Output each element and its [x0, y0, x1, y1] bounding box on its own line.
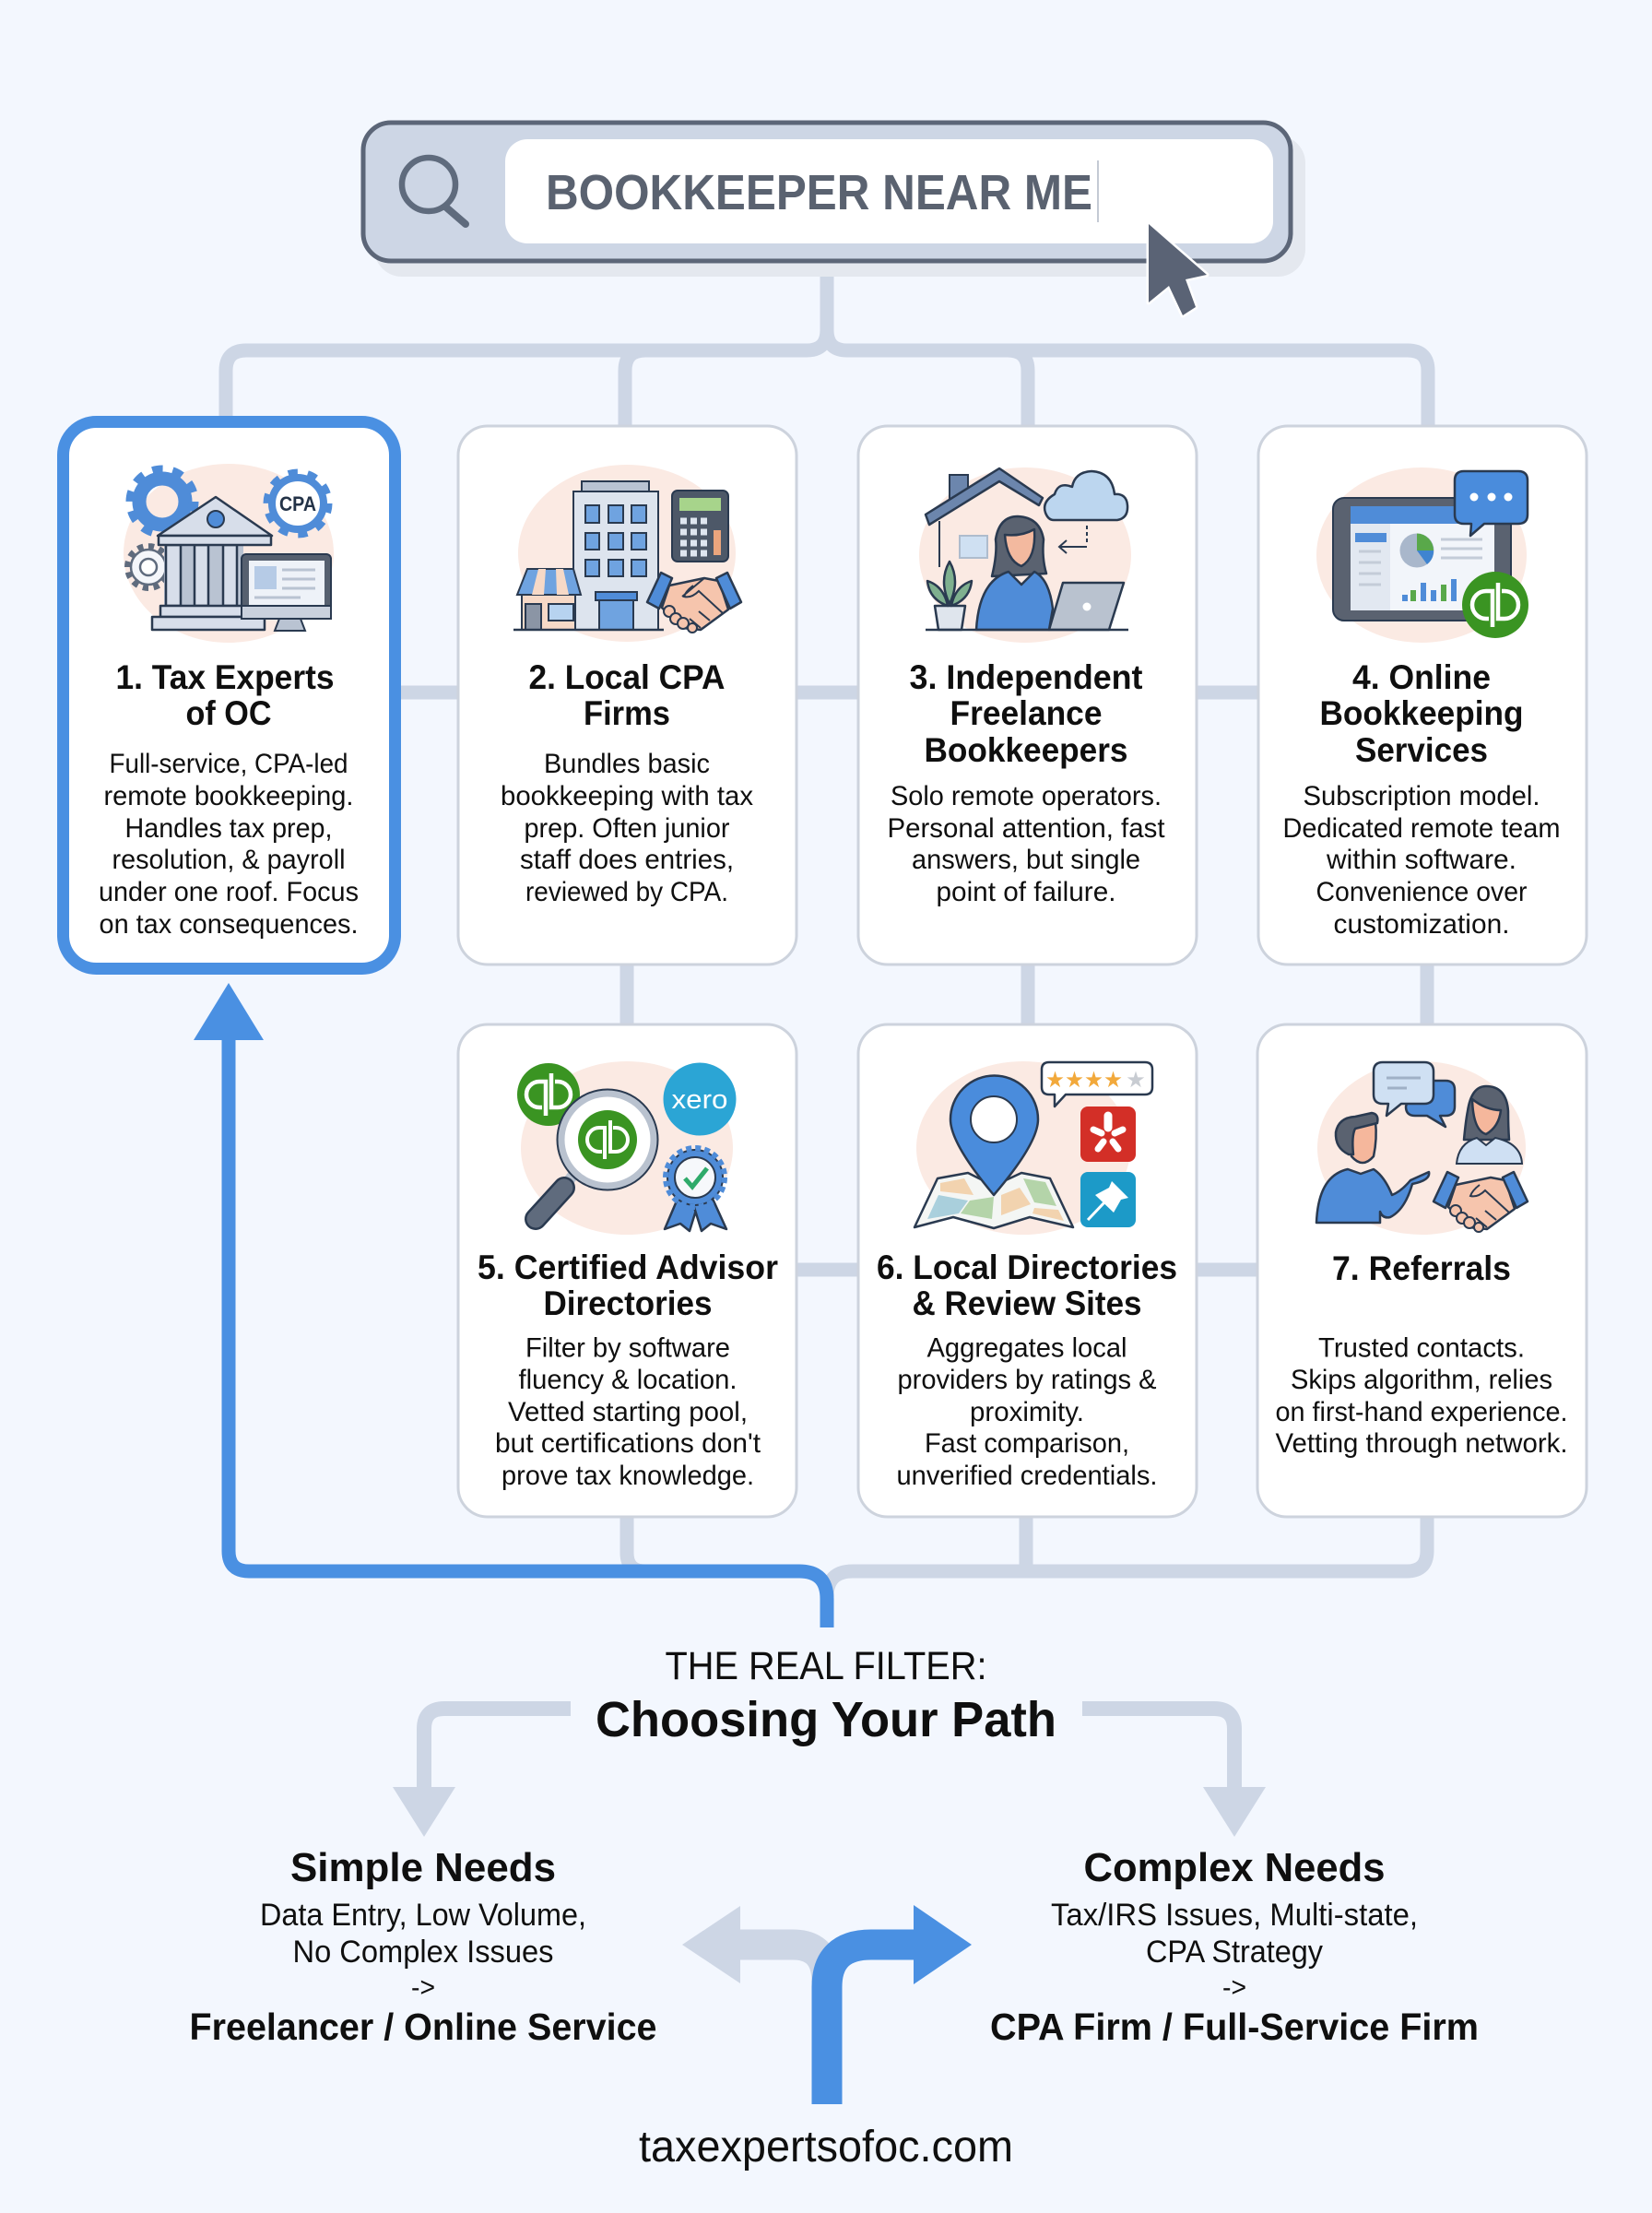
CPA gear label: CPA: [279, 492, 316, 515]
card 2 description: reviewed by CPA.: [525, 877, 728, 907]
card 6 description: Aggregates local: [927, 1333, 1127, 1363]
card 4 description: within software.: [1326, 845, 1516, 875]
card 6 description: providers by ratings &: [898, 1365, 1157, 1395]
card 5 heading: 5. Certified Advisor: [478, 1249, 778, 1286]
icon: mouse pointer: [1149, 224, 1207, 315]
card 1 description: under one roof. Focus: [99, 877, 359, 907]
review stars: ★★★★: [1045, 1068, 1123, 1093]
text block: simple needs: Data Entry, Low Volume,: [260, 1898, 586, 1933]
card 3 description: Personal attention, fast: [887, 813, 1165, 844]
card 4 description: customization.: [1333, 909, 1510, 940]
card 1 heading: of OC: [186, 694, 271, 732]
text caret: [1097, 160, 1099, 222]
card 1 description: on tax consequences.: [100, 909, 358, 940]
icon: freelancer at home with laptop: [919, 467, 1131, 643]
card 5 description: fluency & location.: [518, 1365, 738, 1395]
text block: simple needs: Freelancer / Online Service: [190, 2006, 656, 2048]
card 2 heading: Firms: [584, 694, 670, 732]
card 4 description: Convenience over: [1316, 877, 1528, 907]
card 3 heading: Bookkeepers: [924, 731, 1128, 769]
card 2 description: prep. Often junior: [524, 813, 730, 844]
panel: card 1 Tax Experts of OC: [63, 422, 395, 968]
text block: complex needs: ->: [1222, 1972, 1246, 2003]
card 4 heading: [1320, 658, 1523, 769]
card 7 description: Trusted contacts.: [1318, 1333, 1525, 1363]
text block: simple needs: No Complex Issues: [293, 1935, 553, 1970]
panel: card 3 Independent Freelance Bookkeepers: [858, 426, 1197, 964]
card 3 description: answers, but single: [912, 845, 1140, 875]
heading: the real filter: [596, 1644, 1056, 1747]
card 1 description: Handles tax prep,: [125, 813, 332, 844]
card 6 heading: [877, 1249, 1177, 1322]
icon: handshake: [647, 573, 741, 633]
arrow: filter to complex needs: [1082, 1709, 1266, 1837]
card 5 description: Vetted starting pool,: [508, 1397, 748, 1427]
card 5 description: prove tax knowledge.: [502, 1461, 754, 1491]
card 2 description: bookkeeping with tax: [501, 781, 753, 811]
card 6 heading: 6. Local Directories: [877, 1249, 1177, 1286]
icon: people talking with handshake: [1316, 1061, 1528, 1235]
card 4 description: Subscription model.: [1304, 781, 1540, 811]
card 1 description: Full-service, CPA-led: [109, 749, 348, 779]
text block: simple needs: Simple Needs: [290, 1845, 556, 1890]
blue path arrow to card 1: [194, 983, 827, 1627]
text block: complex needs: CPA Firm / Full-Service Firm: [990, 2006, 1479, 2048]
bottom grey connector: [627, 1518, 1427, 1597]
top connector tree: [226, 262, 1428, 1270]
card 3 heading: 3. Independent: [909, 658, 1143, 696]
search bar: [363, 123, 1305, 315]
heading: the real filter: THE REAL FILTER:: [666, 1644, 986, 1688]
icon: office building shop calculator handshake: [513, 465, 741, 642]
card 6 description: unverified credentials.: [896, 1461, 1158, 1491]
text block: complex needs: Complex Needs: [1084, 1845, 1385, 1890]
text block: simple needs: ->: [411, 1972, 435, 2003]
card 7 heading: 7. Referrals: [1332, 1249, 1511, 1287]
card 2 description: [501, 749, 753, 907]
card 6 description: proximity.: [970, 1397, 1084, 1427]
card 7 description: Skips algorithm, relies: [1291, 1365, 1552, 1395]
card 5 description: Filter by software: [525, 1333, 730, 1363]
card 4 heading: Services: [1355, 731, 1488, 769]
card 2 description: staff does entries,: [520, 845, 734, 875]
icon: magnifier with QuickBooks Xero and badge: [517, 1061, 736, 1235]
icon: map pin with review badges: [914, 1061, 1152, 1235]
card 6 heading: & Review Sites: [913, 1284, 1141, 1322]
text block: complex needs: [990, 1845, 1479, 2048]
arrow: fork blue right: [827, 1905, 972, 2104]
card 3 heading: Freelance: [950, 694, 1103, 732]
text block: complex needs: CPA Strategy: [1146, 1935, 1323, 1970]
card 3 heading: [909, 658, 1143, 769]
card 7 description: [1276, 1333, 1567, 1459]
card 6 description: Fast comparison,: [925, 1428, 1129, 1459]
card 1 description: resolution, & payroll: [112, 845, 345, 875]
panel: card 2 Local CPA Firms: [458, 426, 796, 964]
card 2 heading: 2. Local CPA: [529, 658, 725, 696]
panel: card 5 Certified Advisor Directories: [458, 1024, 796, 1517]
text block: complex needs: Tax/IRS Issues, Multi-state,: [1051, 1898, 1418, 1933]
card 3 description: point of failure.: [937, 877, 1115, 907]
card 1 heading: [116, 658, 334, 732]
card 1 heading: 1. Tax Experts: [116, 658, 334, 696]
card 4 heading: 4. Online: [1352, 658, 1491, 696]
card 5 description: [495, 1333, 761, 1491]
icon: magnifier: [402, 158, 466, 224]
arrow: fork grey left: [682, 1906, 827, 1983]
card 4 description: Dedicated remote team: [1283, 813, 1560, 844]
Xero logo label: xero: [671, 1085, 728, 1115]
card 5 description: but certifications don't: [495, 1428, 761, 1459]
card 7 description: Vetting through network.: [1276, 1428, 1567, 1459]
card 6 description: [896, 1333, 1158, 1491]
card 1 description: [99, 749, 359, 940]
panel: card 6 Local Directories and Review Sites: [858, 1024, 1197, 1517]
card 1 description: remote bookkeeping.: [103, 781, 354, 811]
card 2 heading: [529, 658, 725, 732]
card 4 description: [1283, 781, 1560, 940]
card 2 description: Bundles basic: [544, 749, 710, 779]
card 7 description: on first-hand experience.: [1276, 1397, 1567, 1427]
panel: card 4 Online Bookkeeping Services: [1258, 426, 1587, 964]
arrow: filter to simple needs: [393, 1709, 571, 1837]
panel: card 7 Referrals: [1257, 1024, 1587, 1517]
card 5 heading: Directories: [544, 1284, 712, 1322]
icon: bank gears CPA monitor: [124, 464, 334, 643]
icon: tablet dashboard with chat and QuickBooks: [1316, 467, 1528, 643]
card 3 description: Solo remote operators.: [891, 781, 1162, 811]
icon: QuickBooks logo: [1462, 572, 1528, 638]
card 4 heading: Bookkeeping: [1320, 694, 1523, 732]
card 5 heading: [478, 1249, 778, 1322]
website url: taxexpertsofoc.com: [639, 2123, 1013, 2172]
text block: simple needs: [190, 1845, 656, 2048]
heading: choosing your path: Choosing Your Path: [596, 1692, 1056, 1747]
search query text: BOOKKEEPER NEAR ME: [546, 165, 1092, 220]
icon: handshake: [1434, 1172, 1528, 1232]
card 3 description: [887, 781, 1165, 907]
empty review star: ★: [1126, 1068, 1146, 1093]
